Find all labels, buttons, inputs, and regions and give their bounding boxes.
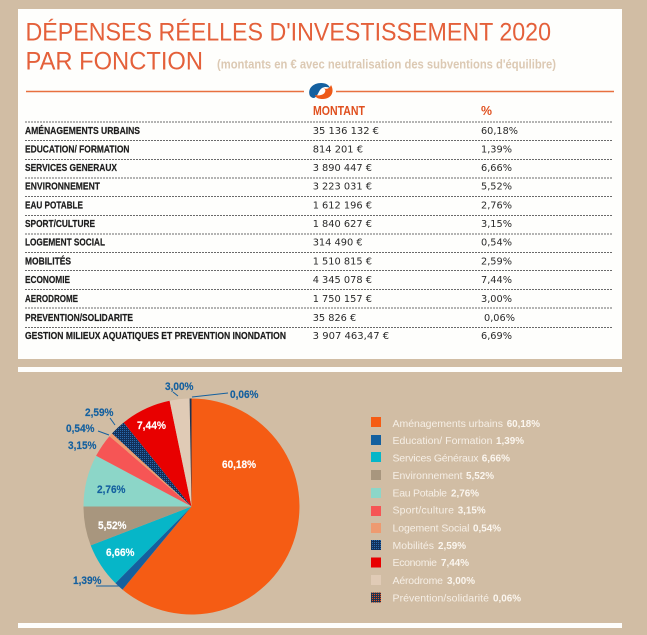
callout 3,00%: 3,00% — [165, 381, 194, 393]
legend item: sport/culture — [371, 504, 486, 516]
pie label 60,18%: 60,18% — [222, 459, 256, 471]
row: education: 814 201 € — [313, 144, 363, 156]
subtitle: (montants en € avec neutralisation des subventions d'équilibre) — [217, 58, 556, 72]
row: aménagements urbains — [25, 124, 518, 137]
divider with logo — [26, 83, 614, 99]
row: gestion milieux aquatiques: GESTION MILIEUX AQUATIQUES ET PREVENTION INONDATION — [25, 330, 286, 342]
slice: eau potable — [83, 456, 192, 506]
row: aerodrome: 3,00% — [481, 294, 512, 305]
title — [26, 18, 551, 75]
callout 0,06%: 0,06% — [230, 389, 259, 401]
title: PAR FONCTION — [26, 47, 203, 75]
legend item: prévention/solidarité: 0,06% — [493, 592, 522, 604]
row: economie: ECONOMIE — [25, 274, 70, 286]
row: eau potable: 2,76% — [481, 200, 512, 212]
legend item: eau potable: Eau Potable — [392, 488, 447, 500]
row: prevention/solidarite: 35 826 € — [313, 313, 356, 324]
row: aerodrome: 1 750 157 € — [313, 294, 372, 305]
row: prevention/solidarite: PREVENTION/SOLIDARITE — [25, 312, 133, 324]
row: aménagements urbains: 35 136 132 € — [313, 126, 379, 137]
legend item: education: Education/ Formation — [392, 435, 493, 447]
legend item: logement social: 0,54% — [473, 522, 502, 534]
row: prevention/solidarite: 0,06% — [484, 313, 515, 324]
row: mobilités: 2,59% — [481, 256, 512, 268]
row: aménagements urbains: AMÉNAGEMENTS URBAINS — [25, 124, 140, 137]
slice: economie — [124, 401, 192, 506]
slice: education — [115, 506, 192, 590]
slice: aménagements urbains — [122, 398, 299, 614]
row: gestion milieux aquatiques: 3 907 463,47 € — [313, 331, 389, 342]
callout 1,39%: 1,39% — [73, 575, 102, 587]
pie label 2,76%: 2,76% — [97, 484, 126, 496]
row: eau potable: EAU POTABLE — [25, 200, 83, 212]
legend — [371, 417, 541, 604]
row: eau potable — [25, 200, 512, 212]
callout 2,59% — [85, 407, 115, 425]
legend item: aérodrome: Aérodrome — [392, 575, 443, 587]
slice: services généraux — [91, 506, 192, 583]
legend item: services généraux: Services Généraux — [392, 452, 479, 464]
slice: environnement — [83, 506, 192, 545]
row: logement social: 314 490 € — [313, 238, 363, 248]
legend item: aménagements urbains: Aménagements urbains — [392, 418, 503, 430]
row: sport/culture: SPORT/CULTURE — [25, 218, 95, 230]
title: DÉPENSES RÉELLES D'INVESTISSEMENT 2020 — [26, 18, 551, 47]
pie label 6,66%: 6,66% — [106, 547, 135, 559]
callout 0,06% — [192, 389, 259, 401]
legend item: prévention/solidarité — [371, 592, 522, 604]
legend item: mobilités: Mobilités — [392, 540, 434, 552]
row: logement social: LOGEMENT SOCIAL — [25, 236, 105, 248]
row: gestion milieux aquatiques — [25, 330, 512, 342]
legend item: economie: Economie — [392, 557, 437, 569]
pie label 5,52%: 5,52% — [98, 520, 127, 532]
legend item: aérodrome — [371, 575, 476, 587]
legend item: environnement: Environnement — [392, 470, 463, 482]
row: services généraux: SERVICES GENERAUX — [25, 162, 117, 174]
legend item: services généraux — [371, 452, 511, 464]
icon: swirl logo — [309, 83, 333, 99]
row: sport/culture: 1 840 627 € — [313, 219, 372, 230]
row: environnement: 3 223 031 € — [313, 182, 372, 192]
row: logement social — [25, 236, 512, 248]
row: mobilités: 1 510 815 € — [313, 256, 372, 268]
legend item: eau potable: 2,76% — [451, 488, 480, 500]
pie chart — [66, 381, 299, 614]
row: sport/culture — [25, 218, 512, 230]
legend item: sport/culture: 3,15% — [458, 504, 486, 516]
slice: mobilités — [112, 422, 192, 506]
legend item: aérodrome: 3,00% — [447, 575, 476, 587]
row: eau potable: 1 612 196 € — [313, 200, 372, 212]
callout 3,15%: 3,15% — [68, 440, 97, 452]
legend item: aménagements urbains: 60,18% — [507, 418, 541, 430]
row: mobilités: MOBILITÉS — [25, 254, 71, 268]
legend item: education — [371, 435, 525, 447]
row: environnement: ENVIRONNEMENT — [25, 180, 100, 192]
row: economie: 7,44% — [481, 275, 512, 286]
legend item: aménagements urbains — [371, 417, 541, 430]
row: environnement: 5,52% — [481, 182, 512, 192]
row: services généraux: 6,66% — [481, 163, 512, 174]
legend item: eau potable — [371, 488, 480, 500]
row: economie — [25, 274, 512, 286]
legend item: education: 1,39% — [496, 435, 525, 447]
legend item: economie: 7,44% — [441, 557, 470, 569]
callout 1,39% — [73, 575, 122, 587]
legend item: mobilités — [371, 540, 467, 552]
row: education — [25, 144, 512, 156]
slice: prévention/solidarité — [190, 398, 192, 506]
row: education: 1,39% — [481, 144, 512, 156]
row: logement social: 0,54% — [481, 238, 512, 248]
row: aerodrome: AERODROME — [25, 293, 78, 305]
column header: montant: MONTANT — [313, 104, 365, 118]
row: services généraux: 3 890 447 € — [313, 163, 372, 174]
slice: aérodrome — [170, 398, 192, 506]
row: aménagements urbains: 60,18% — [481, 126, 518, 137]
row: gestion milieux aquatiques: 6,69% — [481, 331, 512, 342]
legend item: services généraux: 6,66% — [482, 452, 511, 464]
column header: percent: % — [481, 104, 492, 118]
legend item: logement social: Logement Social — [392, 522, 470, 534]
callout 2,59%: 2,59% — [85, 407, 114, 419]
row: environnement — [25, 180, 512, 192]
legend item: environnement: 5,52% — [466, 470, 495, 482]
callout 0,54%: 0,54% — [66, 423, 95, 435]
legend item: prévention/solidarité: Prévention/solidarité — [392, 592, 489, 604]
legend item: mobilités: 2,59% — [438, 540, 467, 552]
pie label 7,44%: 7,44% — [137, 420, 166, 432]
row: prevention/solidarite — [25, 312, 515, 324]
legend item: sport/culture: Sport/culture — [392, 504, 454, 516]
row: services généraux — [25, 162, 512, 174]
row: education: EDUCATION/ FORMATION — [25, 144, 130, 156]
legend item: environnement — [371, 470, 495, 482]
slice: sport/culture — [96, 436, 192, 506]
row: sport/culture: 3,15% — [481, 219, 512, 230]
row: mobilités — [25, 254, 512, 268]
row: aerodrome — [25, 293, 512, 305]
panel: table — [18, 9, 622, 359]
slice: logement social — [110, 433, 192, 506]
legend item: logement social — [371, 522, 502, 534]
legend item: economie — [371, 557, 470, 569]
row: economie: 4 345 078 € — [313, 275, 372, 286]
